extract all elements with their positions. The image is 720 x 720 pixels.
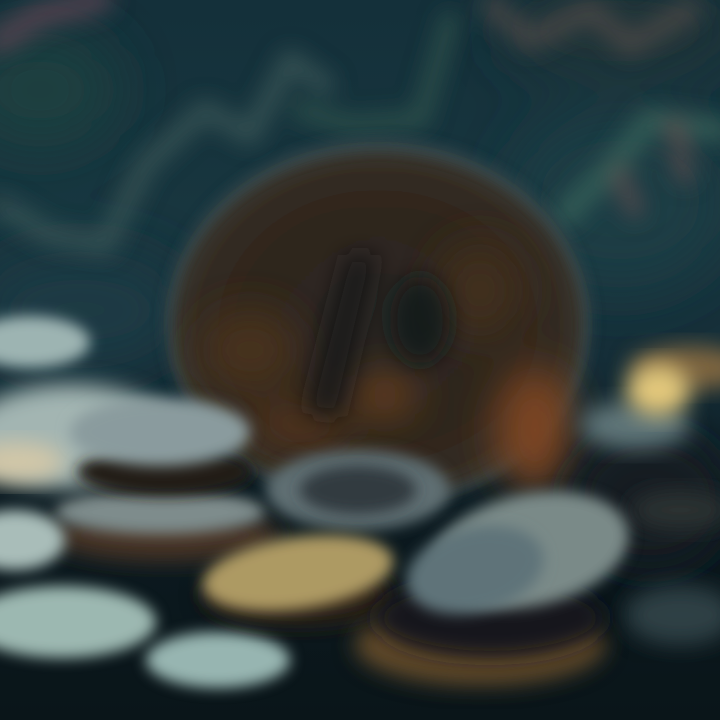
coin symbol — [305, 255, 450, 418]
coin stack: left side — [0, 316, 290, 688]
coin: bronze rim — [355, 605, 605, 685]
coin: silver tilted — [421, 474, 639, 626]
background glows — [0, 0, 720, 370]
coin warm highlights — [200, 240, 575, 492]
coin: left lower band — [50, 509, 280, 561]
coin stack: right side — [570, 346, 720, 645]
coin: left wide — [0, 384, 175, 488]
coin: bottom center — [146, 632, 290, 688]
coin: far left top — [0, 316, 90, 368]
coin: far left mid — [0, 510, 65, 570]
coin: raised stack — [77, 448, 253, 496]
market chart lines — [0, 0, 720, 245]
coin: grey ring — [266, 450, 450, 530]
large central coin — [166, 140, 590, 506]
coin stack: center — [198, 450, 639, 685]
coin: gold — [202, 565, 394, 625]
coin: bottom left — [0, 586, 156, 658]
